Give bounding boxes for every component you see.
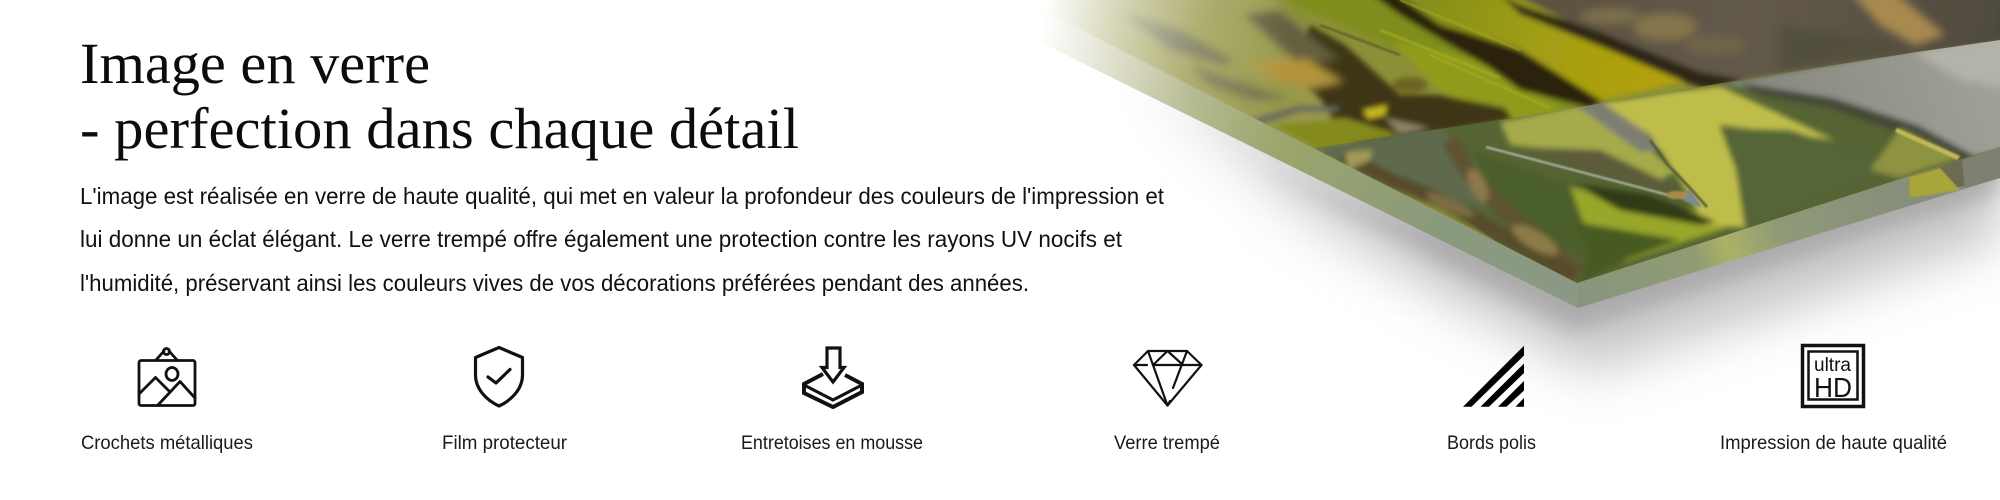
title xyxy=(80,31,799,161)
landscape print xyxy=(1051,0,2000,283)
feature: protective film xyxy=(442,348,567,454)
icon: diagonal stripes xyxy=(1463,346,1524,407)
icon: diamond xyxy=(1134,351,1202,406)
icon: ultra HD badge: HD xyxy=(1814,372,1852,403)
label: Film protecteur xyxy=(442,432,567,454)
label: Entretoises en mousse xyxy=(741,432,923,454)
feature: tempered glass xyxy=(1114,351,1220,454)
icon: ultra HD badge: ultra xyxy=(1814,355,1851,376)
icon: hanging picture xyxy=(139,348,195,406)
glare section of the landscape xyxy=(1314,40,2000,283)
feature: high quality print xyxy=(1720,346,1947,454)
label: Crochets métalliques xyxy=(81,432,253,454)
icon: ultra HD badge xyxy=(1802,346,1864,406)
label: Impression de haute qualité xyxy=(1720,432,1947,454)
glass panel with landscape print xyxy=(955,0,2000,308)
description text xyxy=(80,183,1164,296)
description text: l'humidité, préservant ainsi les couleurs vives de vos décorations préférées pendant des années. xyxy=(80,270,1029,296)
glass edge: right xyxy=(1577,147,2000,308)
title: - perfection dans chaque détail xyxy=(80,96,799,161)
label: Bords polis xyxy=(1447,432,1536,454)
glass edge: left xyxy=(955,0,1578,308)
label: Verre trempé xyxy=(1114,432,1220,454)
icon: shield xyxy=(476,348,522,406)
icon: arrow onto foam pad xyxy=(804,348,862,407)
title: Image en verre xyxy=(80,31,430,96)
description text: L'image est réalisée en verre de haute qualité, qui met en valeur la profondeur des couleurs de l'impression et xyxy=(80,183,1164,209)
feature: foam spacers xyxy=(741,348,923,454)
feature: metal hooks xyxy=(81,348,253,454)
feature: polished edges xyxy=(1447,346,1536,454)
glass panel drop shadow xyxy=(1172,108,2000,392)
glare patch on right edge xyxy=(1909,147,2000,198)
description text: lui donne un éclat élégant. Le verre trempé offre également une protection contre les rayons UV nocifs et xyxy=(80,226,1122,252)
